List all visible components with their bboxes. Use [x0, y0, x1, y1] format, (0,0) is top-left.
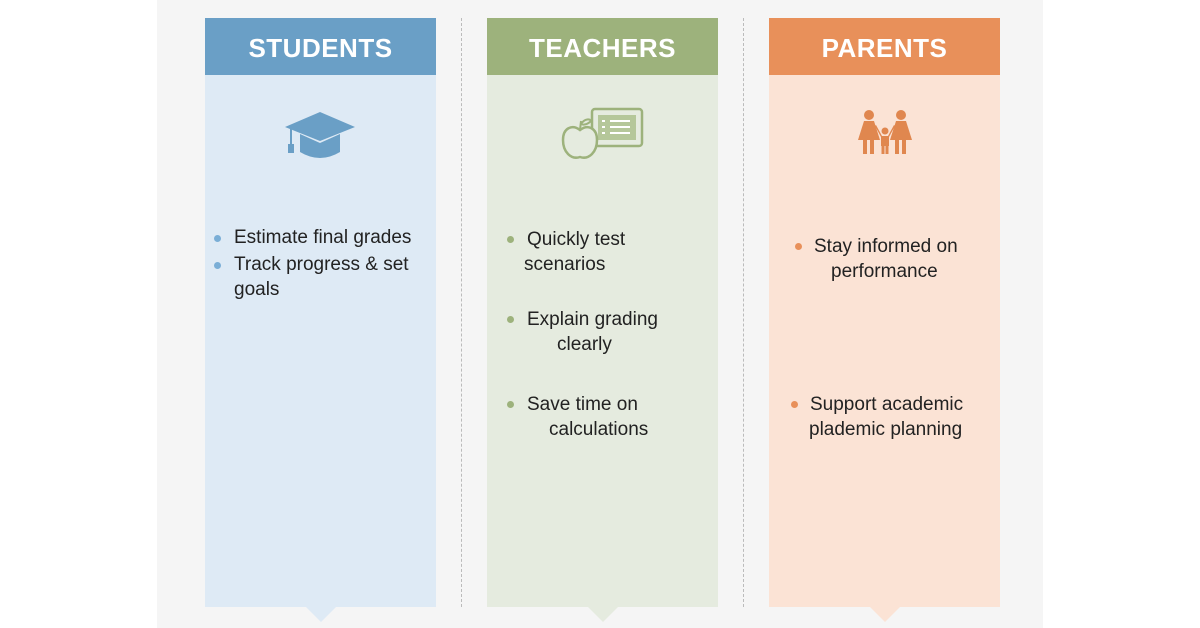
bullet list: teachers: Explain grading: [527, 309, 658, 330]
heading: teachers: TEACHERS: [529, 33, 676, 63]
icon: apple and board: [562, 108, 644, 159]
heading: students: STUDENTS: [248, 33, 393, 63]
bullet list: parents: performance: [831, 261, 938, 282]
bullet list: parents: Stay informed on: [814, 236, 958, 257]
bullet list: students: goals: [234, 279, 279, 300]
icon: family: [858, 110, 912, 154]
bullet list: teachers: calculations: [549, 419, 648, 440]
heading: teachers: [487, 18, 718, 75]
bullet list: teachers: clearly: [557, 334, 612, 355]
bullet list: students: Track progress & set: [234, 254, 409, 275]
heading: parents: [769, 18, 1000, 75]
bullet list: students: [214, 227, 411, 300]
bullet list: teachers: [507, 229, 658, 440]
panel: teachers: [487, 18, 718, 607]
icon: graduation cap: [285, 112, 355, 158]
bullet list: teachers: scenarios: [524, 254, 605, 275]
bullet list: teachers: Save time on: [527, 394, 638, 415]
heading: parents: PARENTS: [822, 33, 947, 63]
panel: students: [205, 18, 436, 607]
bullet list: teachers: Quickly test: [527, 229, 625, 250]
bullet list: parents: plademic planning: [809, 419, 962, 440]
bullet list: students: Estimate final grades: [234, 227, 411, 248]
panel: parents: [769, 18, 1000, 607]
heading: students: [205, 18, 436, 75]
bullet list: parents: [791, 236, 963, 440]
bullet list: parents: Support academic: [810, 394, 963, 415]
